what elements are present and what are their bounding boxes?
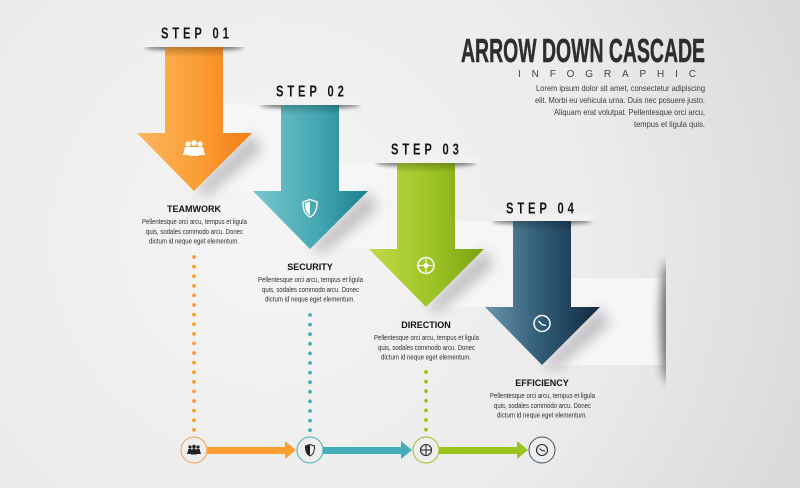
intro paragraph: tempus et ligula quis. — [634, 120, 705, 129]
step 1 arrow — [137, 23, 262, 195]
icon: shield — [303, 200, 317, 217]
text block: teamwork: Pellentesque orci arcu, tempus et ligula — [142, 217, 248, 226]
intro paragraph: Aliquam erat volutpat. Pellentesque orci arcu, — [554, 108, 705, 117]
text block: direction — [374, 320, 480, 362]
text block: direction: Pellentesque orci arcu, tempus et ligula — [374, 333, 480, 342]
text block: efficiency: dictum id neque eget elementum. — [497, 410, 587, 420]
text block: efficiency: EFFICIENCY — [515, 378, 569, 388]
subtitle: INFOGRAPHIC — [518, 69, 696, 80]
text block: teamwork — [142, 204, 248, 246]
step 2 label: STEP 02 — [276, 81, 344, 100]
dotted connectors — [194, 257, 426, 431]
text block: teamwork: quis, sodales commodo arcu. Donec — [146, 227, 243, 236]
icon: compass — [418, 258, 434, 274]
text block: security — [258, 262, 364, 304]
icon: clock — [534, 316, 550, 332]
text block: security: SECURITY — [287, 262, 333, 272]
step 3 arrow — [369, 139, 494, 311]
text block: efficiency — [490, 378, 596, 420]
timeline arrow: teal — [323, 441, 412, 459]
text block: direction: DIRECTION — [401, 320, 451, 330]
step 4 arrow — [485, 198, 610, 369]
step 1 label: STEP 01 — [161, 23, 229, 42]
band end shadow — [661, 262, 675, 382]
text block: efficiency: Pellentesque orci arcu, tempus et ligula — [490, 391, 596, 400]
intro paragraph — [535, 84, 705, 129]
timeline node: compass — [413, 437, 439, 463]
step 4 label: STEP 04 — [506, 198, 574, 217]
text block: teamwork: dictum id neque eget elementum. — [149, 236, 239, 246]
intro paragraph: elit. Morbi eu vehicula urna. Duis nec posuere justo. — [535, 96, 705, 105]
text block: security: quis, sodales commodo arcu. Donec — [262, 285, 359, 294]
step 2 arrow — [253, 81, 378, 253]
text block: security: dictum id neque eget elementum. — [265, 294, 355, 304]
timeline node: clock — [529, 437, 555, 463]
timeline arrow: green — [439, 441, 528, 459]
white cascade bands — [194, 105, 666, 365]
intro paragraph: Lorem ipsum dolor sit amet, consectetur adipiscing — [536, 84, 705, 93]
timeline node: shield — [297, 437, 323, 463]
text block: direction: quis, sodales commodo arcu. Donec — [378, 343, 475, 352]
step 3 label: STEP 03 — [391, 139, 459, 158]
text block: teamwork: TEAMWORK — [167, 204, 221, 214]
timeline arrow: orange — [207, 441, 296, 459]
icon: team — [183, 140, 205, 156]
text block: security: Pellentesque orci arcu, tempus et ligula — [258, 275, 364, 284]
timeline node: team — [181, 437, 207, 463]
text block: direction: dictum id neque eget elementum. — [381, 352, 471, 362]
text block: efficiency: quis, sodales commodo arcu. Donec — [494, 401, 591, 410]
